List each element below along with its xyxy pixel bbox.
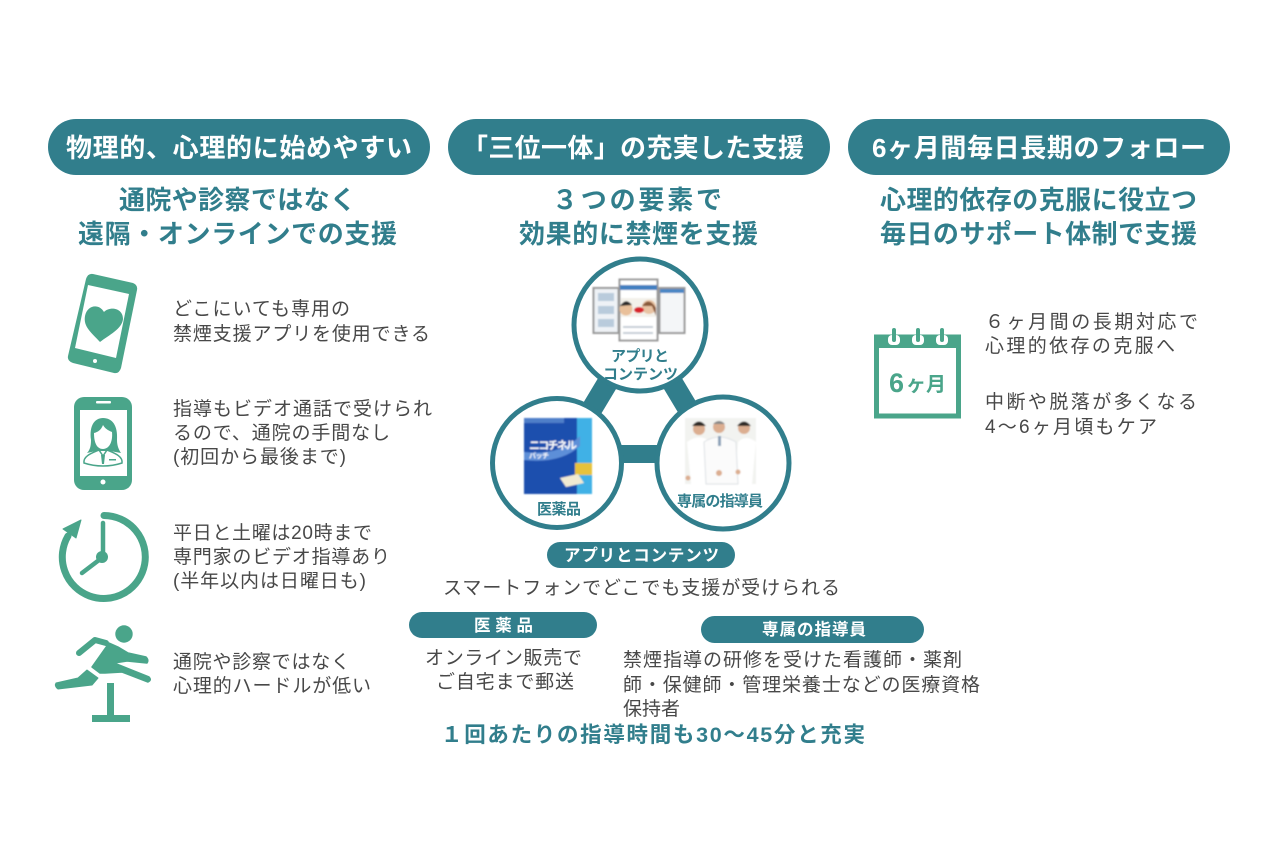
circle: instructors (657, 397, 789, 529)
text: psychological hurdle: 通院や診察ではなく (173, 651, 350, 673)
label pill: medicine: 医薬品 (474, 616, 533, 635)
text: hours (173, 522, 390, 592)
icon: phone with heart (68, 274, 137, 373)
heading pill: left: 物理的、心理的に始めやすい (66, 133, 412, 163)
icon: clock with arrow (62, 516, 145, 598)
connectors (590, 372, 690, 454)
subheading: left: 遠隔・オンラインでの支援 (78, 219, 397, 249)
text: app description: スマートフォンでどこでも支援が受けられる (443, 577, 840, 599)
text: instructors description: 禁煙指導の研修を受けた看護師・薬剤 (623, 649, 962, 671)
text: video guidance: るので、通院の手間なし (173, 422, 390, 444)
subheading: left: 通院や診察ではなく (119, 185, 356, 215)
text: psychological hurdle (173, 651, 371, 697)
label pill: instructors (701, 616, 924, 643)
subheading: center (519, 185, 758, 249)
diagram: three circles (492, 259, 789, 529)
text: long-term support (985, 311, 1198, 357)
circle: app and content (574, 259, 706, 391)
label pill: app and content: アプリとコンテンツ (564, 546, 719, 565)
heading pill: center (448, 119, 830, 175)
icon: calendar six months: ヶ月 (906, 374, 946, 396)
icon: hurdle runner (55, 625, 150, 722)
text: instructors description (623, 649, 980, 720)
callout: session length: １回あたりの指導時間も30～45分と充実 (441, 723, 865, 747)
text: app: どこにいても専用の (173, 298, 350, 320)
text: video guidance: 指導もビデオ通話で受けられ (173, 398, 432, 420)
text: hours: (半年以内は日曜日も) (173, 570, 366, 592)
heading pill: right (848, 119, 1230, 175)
text: medicine description: オンライン販売で (425, 647, 582, 669)
icon: phone with instructor (74, 397, 132, 490)
heading pill: right: 6ヶ月間毎日長期のフォロー (872, 133, 1206, 163)
label pill: medicine (409, 612, 597, 638)
circle: medicine (492, 398, 622, 528)
text: hours: 平日と土曜は20時まで (173, 522, 372, 544)
subheading: center: ３つの要素で (552, 185, 722, 215)
icon: calendar six months: 6 (889, 368, 904, 398)
text: video guidance (173, 398, 432, 468)
circle: medicine: ニコチネル (529, 439, 577, 452)
subheading: center: 効果的に禁煙を支援 (519, 219, 758, 249)
text: medicine description: ご自宅まで郵送 (436, 671, 574, 693)
panel: center column (409, 119, 980, 747)
text: instructors description: 保持者 (623, 698, 680, 720)
circle: app and content: アプリと (611, 348, 669, 365)
text: app (173, 298, 430, 345)
label pill: instructors: 専属の指導員 (762, 620, 866, 639)
subheading: right: 毎日のサポート体制で支援 (880, 219, 1197, 249)
text: dropout care: 4～6ヶ月頃もケア (985, 416, 1157, 438)
text: dropout care: 中断や脱落が多くなる (985, 391, 1197, 413)
text: app: 禁煙支援アプリを使用できる (173, 323, 430, 345)
label pill: app and content (547, 542, 735, 568)
text: long-term support: ６ヶ月間の長期対応で (985, 311, 1198, 333)
heading pill: left (48, 119, 430, 175)
text: video guidance: (初回から最後まで) (173, 446, 346, 468)
text: psychological hurdle: 心理的ハードルが低い (173, 675, 371, 697)
circle: medicine: パッチ (529, 452, 549, 460)
circle: instructors: 専属の指導員 (677, 492, 763, 510)
icon: calendar six months (874, 328, 961, 416)
circle: medicine: 医薬品 (537, 501, 581, 518)
panel: left column (48, 119, 432, 722)
heading pill: center: 「三位一体」の充実した支援 (462, 133, 804, 163)
subheading: right: 心理的依存の克服に役立つ (880, 185, 1197, 215)
text: dropout care (985, 391, 1197, 438)
text: hours: 専門家のビデオ指導あり (173, 546, 390, 568)
text: instructors description: 師・保健師・管理栄養士などの医療資格 (623, 674, 980, 696)
text: medicine description (425, 647, 582, 693)
text: long-term support: 心理的依存の克服へ (985, 335, 1175, 357)
circle: app and content: コンテンツ (603, 366, 678, 383)
panel: right column (848, 119, 1230, 438)
subheading: right (880, 185, 1197, 249)
subheading: left (78, 185, 397, 249)
